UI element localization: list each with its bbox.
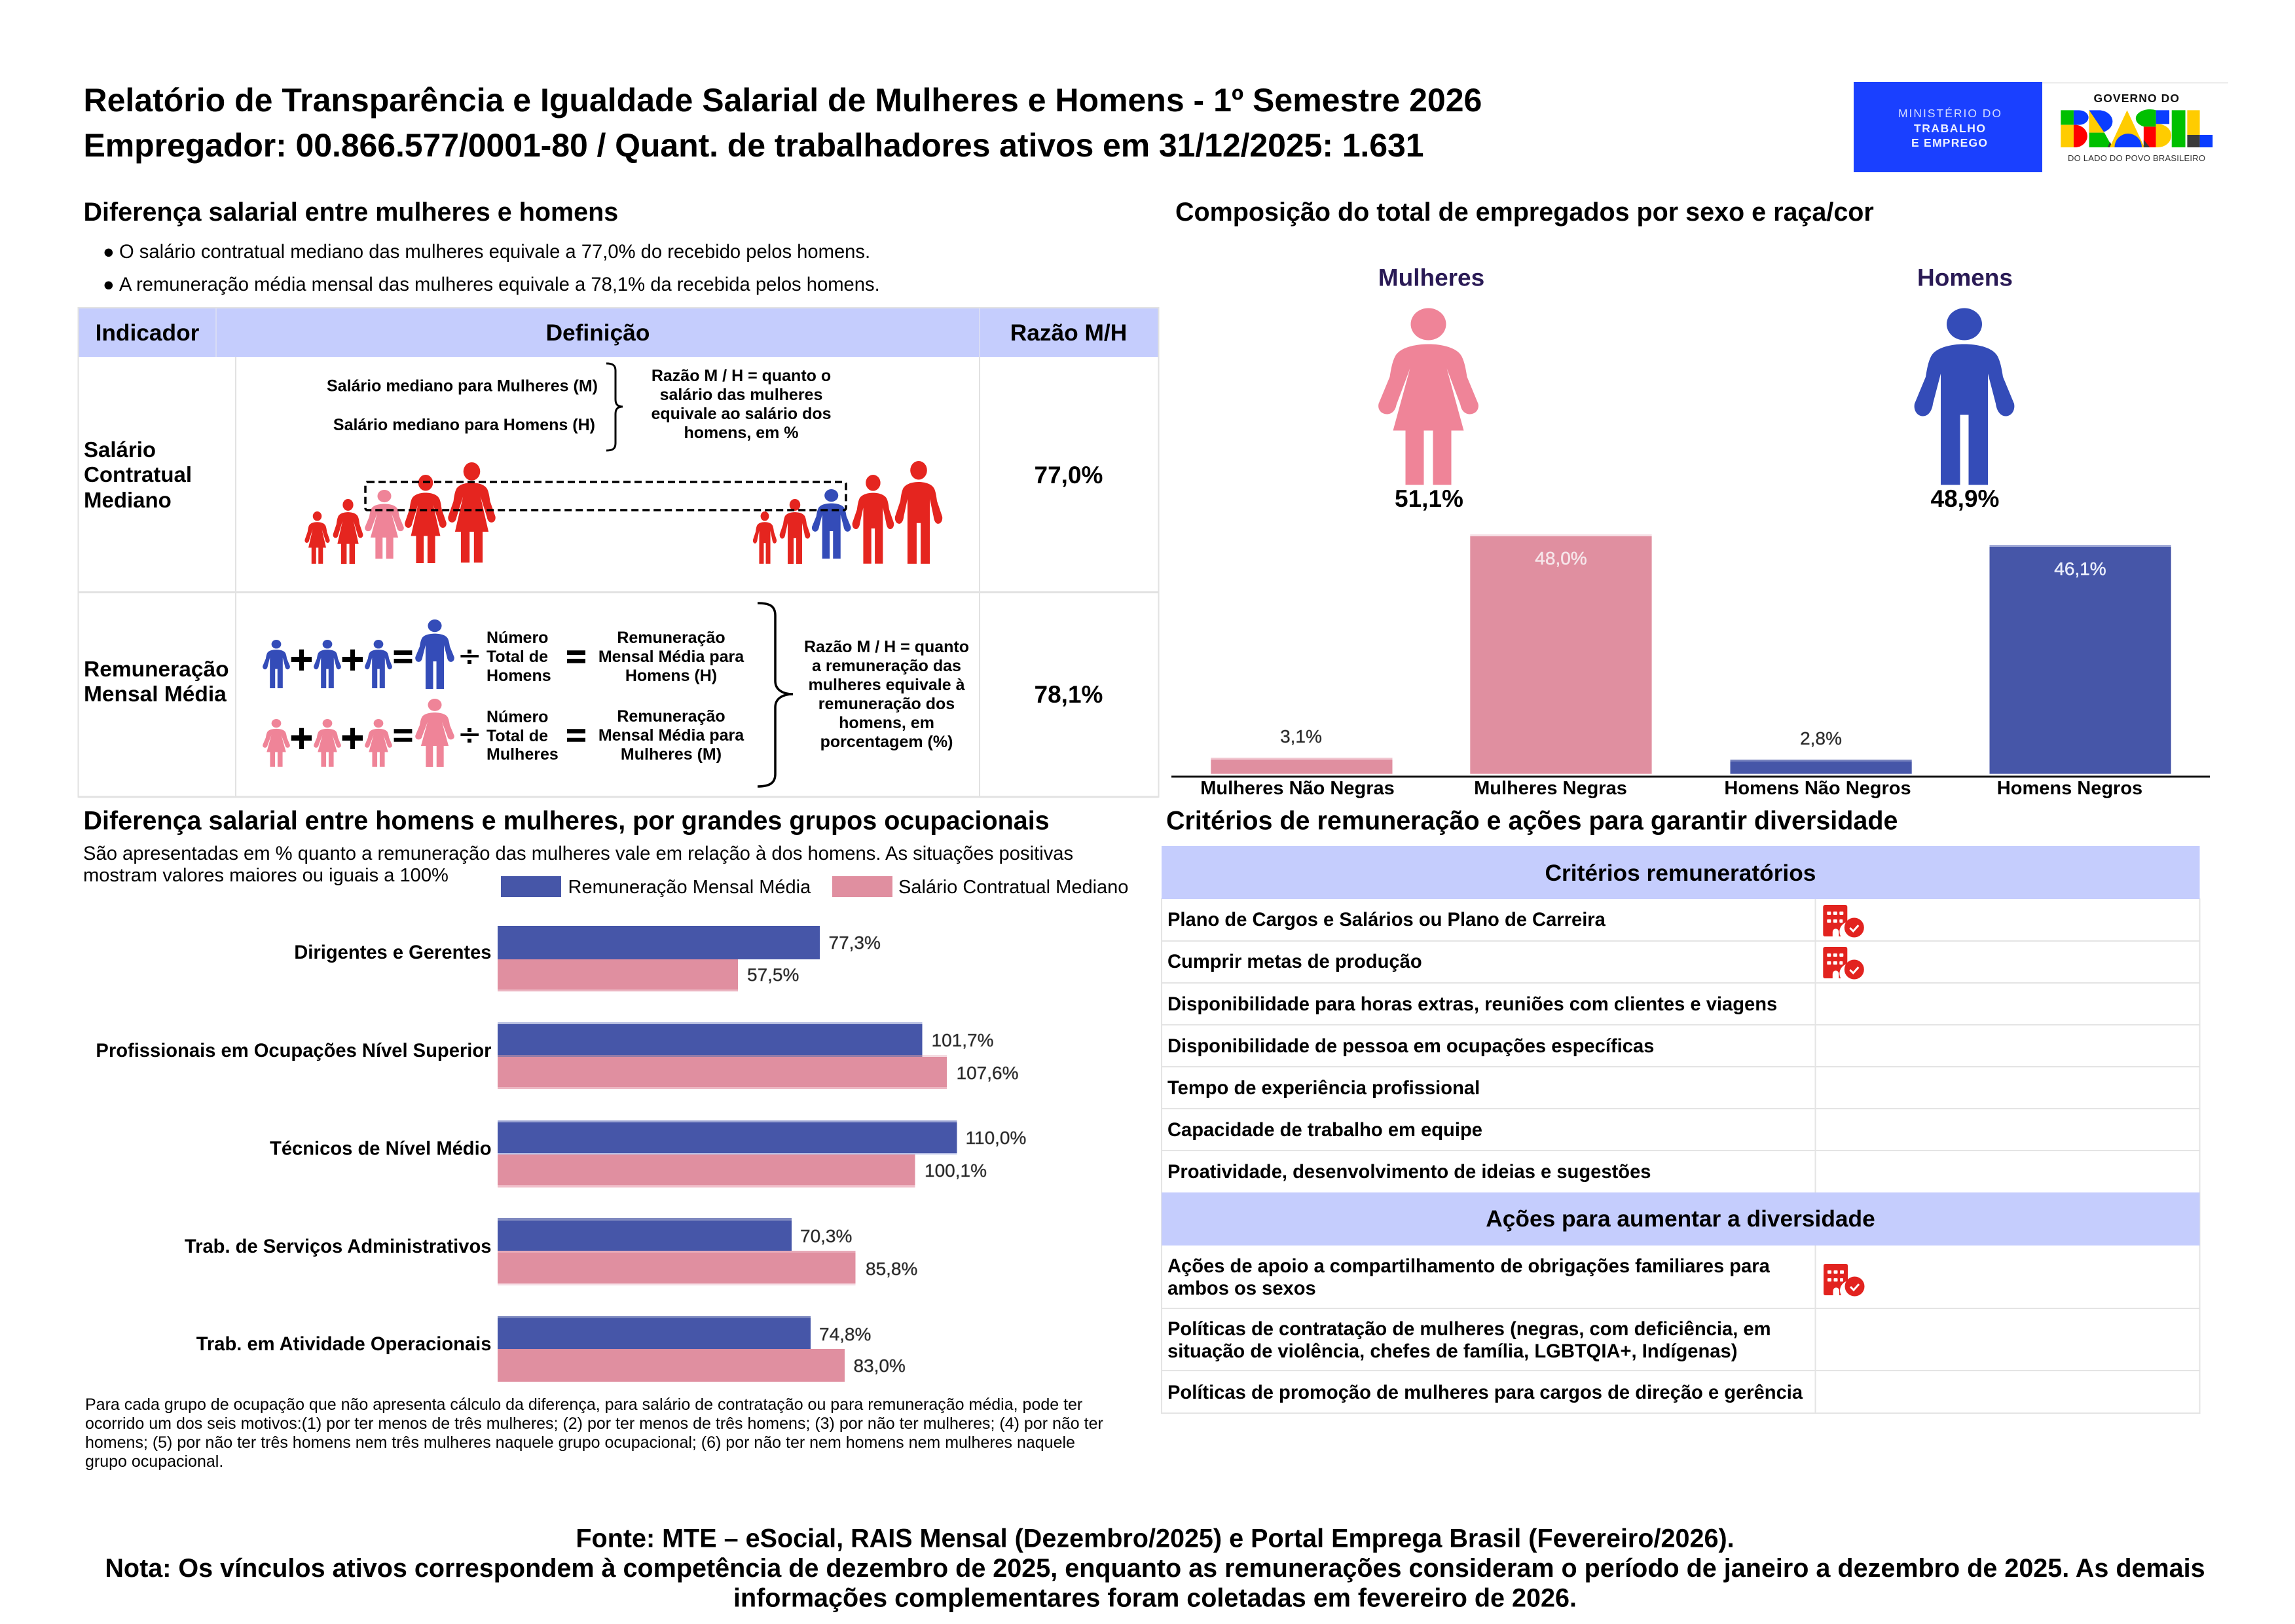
group: profissionais nível superior: Profissionais em Ocupações Nível Superior xyxy=(96,1041,491,1061)
group: atividade operacionais xyxy=(196,1316,906,1382)
bar: mulheres negras xyxy=(1470,534,1652,799)
formula: women: Total de xyxy=(487,727,548,745)
title: Empregador: 00.866.577/0001-80 / Quant. de trabalhadores ativos em 31/12/2025: 1.631 xyxy=(84,127,1423,164)
group: técnicos de nível médio: 100,1% xyxy=(925,1160,987,1181)
ratio explanation: homens, em xyxy=(839,714,934,732)
criteria rows: Cumprir metas de produção xyxy=(1167,951,1422,972)
bar: homens não negros: 2,8% xyxy=(1800,728,1842,748)
icons: men ordered by salary xyxy=(753,461,942,564)
panel: criteria table xyxy=(1162,846,2200,1413)
group: profissionais nível superior xyxy=(96,1022,1018,1089)
formula: women: Remuneração xyxy=(617,707,725,726)
row: salário contratual mediano: Contratual xyxy=(84,462,192,487)
criteria rows: Disponibilidade de pessoa em ocupações específicas xyxy=(1167,1036,1654,1057)
group: técnicos de nível médio: Técnicos de Nível Médio xyxy=(270,1138,491,1159)
action rows: situação de violência, chefes de família, LGBTQIA+, Indígenas) xyxy=(1167,1341,1737,1362)
bar: homens não negros xyxy=(1724,728,1912,799)
ratio explanation: mulheres equivale à xyxy=(808,676,965,694)
text block: key findings: O salário contratual mediano das mulheres equivale a 77,0% do recebido pelos homens. xyxy=(119,242,870,263)
icon: company check xyxy=(1823,905,1864,938)
footer: source and note: Nota: Os vínculos ativos correspondem à competência de dezembro de 2025, enquanto as remunerações consideram o período de janeiro a dezembro de 2025. As demais xyxy=(105,1554,2205,1583)
criteria rows xyxy=(1167,910,1777,1183)
bar: homens não negros: Homens Não Negros xyxy=(1724,778,1911,799)
bar: mulheres negras: 48,0% xyxy=(1535,548,1587,568)
row: remuneração mensal média: Remuneração xyxy=(84,657,229,682)
logo: Ministério do Trabalho e Emprego / Governo do Brasil xyxy=(1854,82,2228,172)
header: critérios remuneratórios: Critérios remuneratórios xyxy=(1545,860,1816,886)
bar chart: occupational groups xyxy=(96,926,1026,1382)
row: remuneração mensal média: Mensal Média xyxy=(84,682,227,707)
row: salário contratual mediano xyxy=(84,363,1103,564)
bar: mulheres não negras: Mulheres Não Negras xyxy=(1200,778,1395,799)
criteria rows: Tempo de experiência profissional xyxy=(1167,1078,1480,1099)
title: Relatório de Transparência e Igualdade Salarial de Mulheres e Homens - 1º Semestre 2026 xyxy=(84,82,1482,119)
formula: women: Mulheres (M) xyxy=(621,745,722,764)
group: profissionais nível superior: 107,6% xyxy=(956,1063,1018,1083)
text block: chart explanation: mostram valores maiores ou iguais a 100% xyxy=(83,865,449,886)
logo: Ministério do Trabalho e Emprego / Governo do Brasil: TRABALHO xyxy=(1914,122,1985,135)
formula: men: Homens xyxy=(487,667,551,685)
panel: men share: 48,9% xyxy=(1931,485,1999,512)
criteria rows: Capacidade de trabalho em equipe xyxy=(1167,1120,1482,1141)
group: atividade operacionais: Trab. em Atividade Operacionais xyxy=(196,1334,491,1355)
text block: chart explanation: São apresentadas em % quanto a remuneração das mulheres vale em relação à dos homens. As situações positivas xyxy=(83,843,1073,864)
action rows: Políticas de promoção de mulheres para cargos de direção e gerência xyxy=(1167,1382,1803,1403)
value 77,0%: 77,0% xyxy=(1035,462,1103,489)
text block: chart footnote: ocorrido um dos seis motivos:(1) por ter menos de três mulheres; (2) por ter menos de três homens; (3) por não ter mulheres; (4) por não ter xyxy=(85,1414,1103,1433)
group: atividade operacionais: 74,8% xyxy=(819,1324,871,1344)
text block: chart footnote: grupo ocupacional. xyxy=(85,1452,223,1471)
ratio explanation xyxy=(804,638,969,751)
formula: men: Homens (H) xyxy=(625,667,717,685)
text block: key findings: A remuneração média mensal das mulheres equivale a 78,1% da recebida pelos homens. xyxy=(119,274,880,295)
footer: source and note xyxy=(105,1524,2205,1612)
panel: women share: Mulheres xyxy=(1378,265,1484,291)
text block: key findings: ● xyxy=(103,274,115,295)
header: ações para aumentar a diversidade xyxy=(1162,1192,2200,1246)
formula: men: Total de xyxy=(487,648,548,666)
row: remuneração mensal média xyxy=(84,603,1103,786)
text block: chart footnote: Para cada grupo de ocupação que não apresenta cálculo da diferença, para salário de contratação ou para remuneração média, pode ter xyxy=(85,1395,1082,1414)
group: profissionais nível superior: 101,7% xyxy=(931,1030,993,1050)
ratio explanation: a remuneração das xyxy=(812,657,961,675)
ratio explanation: Razão M / H = quanto xyxy=(804,638,969,656)
group: atividade operacionais: 83,0% xyxy=(854,1356,906,1376)
header: ações para aumentar a diversidade: Ações para aumentar a diversidade xyxy=(1486,1206,1875,1232)
heading: grupos ocupacionais: Diferença salarial entre homens e mulheres, por grandes grupos ocupacionais xyxy=(84,807,1050,836)
brace xyxy=(606,363,623,451)
text block: chart footnote: homens; (5) por não ter três homens nem três mulheres naquele grupo ocupacional; (6) por não ter nem homens nem mulheres naquele xyxy=(85,1433,1075,1452)
ratio explanation: equivale ao salário dos xyxy=(651,405,832,423)
row: salário contratual mediano: Mediano xyxy=(84,488,172,512)
group: serviços administrativos xyxy=(185,1218,917,1285)
table header xyxy=(79,308,1159,357)
heading: critérios: Critérios de remuneração e ações para garantir diversidade xyxy=(1166,807,1898,836)
dashed median box xyxy=(365,482,846,510)
legend: Remuneração Mensal Média xyxy=(568,877,811,898)
table header: Razão M/H xyxy=(1010,320,1127,346)
action rows: ambos os sexos xyxy=(1167,1278,1316,1299)
formula: men: Mensal Média para xyxy=(598,648,744,666)
panel: men share: Homens xyxy=(1917,265,2013,291)
group: dirigentes e gerentes xyxy=(294,926,881,991)
formula: women: Mensal Média para xyxy=(598,726,744,745)
icon: company check xyxy=(1824,1264,1865,1297)
bar: mulheres negras: Mulheres Negras xyxy=(1474,778,1627,799)
ratio explanation: remuneração dos xyxy=(818,695,955,713)
group: serviços administrativos: Trab. de Serviços Administrativos xyxy=(185,1236,491,1257)
ratio explanation: homens, em % xyxy=(684,424,799,442)
group: dirigentes e gerentes: 77,3% xyxy=(829,932,881,953)
logo: Ministério do Trabalho e Emprego / Governo do Brasil: DO LADO DO POVO BRASILEIRO xyxy=(2068,153,2205,163)
ratio explanation: Razão M / H = quanto o xyxy=(652,367,831,385)
median definition labels: Salário mediano para Mulheres (M) xyxy=(327,377,598,396)
formula: men: Número xyxy=(487,629,548,647)
icons: women ordered by salary xyxy=(304,462,496,564)
header: critérios remuneratórios xyxy=(1162,846,2200,899)
value 78,1%: 78,1% xyxy=(1035,681,1103,708)
text block: key findings xyxy=(103,242,880,295)
text block: key findings: ● xyxy=(103,242,115,263)
panel: women share xyxy=(1378,265,1484,512)
bar: homens negros: Homens Negros xyxy=(1997,778,2142,799)
logo: Ministério do Trabalho e Emprego / Governo do Brasil: E EMPREGO xyxy=(1911,136,1987,149)
logo: Ministério do Trabalho e Emprego / Governo do Brasil: GOVERNO DO xyxy=(2094,92,2179,105)
action rows: Ações de apoio a compartilhamento de obrigações familiares para xyxy=(1167,1256,1771,1277)
logo: Ministério do Trabalho e Emprego / Governo do Brasil: MINISTÉRIO DO xyxy=(1898,107,2001,120)
group: técnicos de nível médio xyxy=(270,1120,1026,1188)
action rows xyxy=(1167,1256,1803,1403)
ratio explanation: salário das mulheres xyxy=(660,386,822,404)
icon: company check xyxy=(1823,947,1864,980)
median definition labels xyxy=(327,377,598,434)
criteria rows: Plano de Cargos e Salários ou Plano de Carreira xyxy=(1167,910,1606,931)
bar: mulheres não negras xyxy=(1200,726,1395,799)
bar: homens negros: 46,1% xyxy=(2054,559,2106,579)
heading: diferença salarial: Diferença salarial entre mulheres e homens xyxy=(84,198,618,227)
median definition labels: Salário mediano para Homens (H) xyxy=(333,416,595,434)
title xyxy=(84,82,1482,164)
formula: men xyxy=(263,619,744,689)
criteria rows: Disponibilidade para horas extras, reuniões com clientes e viagens xyxy=(1167,994,1777,1015)
formula: men: Remuneração xyxy=(617,629,725,647)
bar: homens negros xyxy=(1989,545,2171,799)
group: serviços administrativos: 70,3% xyxy=(800,1226,852,1246)
panel: indicator table xyxy=(79,308,1159,797)
table header: Definição xyxy=(546,320,650,346)
text block: chart footnote xyxy=(85,1395,1103,1471)
legend: Salário Contratual Mediano xyxy=(898,877,1128,898)
group: serviços administrativos: 85,8% xyxy=(866,1259,917,1279)
criteria rows: Proatividade, desenvolvimento de ideias e sugestões xyxy=(1167,1162,1651,1183)
heading: composição: Composição do total de empregados por sexo e raça/cor xyxy=(1175,198,1874,227)
panel: men share xyxy=(1915,265,2014,512)
group: técnicos de nível médio: 110,0% xyxy=(965,1128,1026,1148)
group: dirigentes e gerentes: 57,5% xyxy=(747,965,799,985)
legend xyxy=(501,876,1128,898)
ratio explanation: porcentagem (%) xyxy=(820,733,953,751)
group: dirigentes e gerentes: Dirigentes e Gerentes xyxy=(294,942,491,963)
footer: source and note: informações complementares foram coletadas em fevereiro de 2026. xyxy=(733,1583,1577,1612)
action rows: Políticas de contratação de mulheres (negras, com deficiência, em xyxy=(1167,1319,1771,1340)
bar: mulheres não negras: 3,1% xyxy=(1280,726,1322,747)
ratio explanation xyxy=(651,367,832,442)
row: salário contratual mediano: Salário xyxy=(84,437,156,462)
formula: women: Mulheres xyxy=(487,745,559,764)
bar chart: composition by sex and race xyxy=(1171,534,2210,799)
formula: women: Número xyxy=(487,708,548,726)
table header: Indicador xyxy=(96,320,200,346)
panel: women share: 51,1% xyxy=(1395,485,1463,512)
text block: chart explanation xyxy=(83,843,1073,886)
formula: women xyxy=(263,699,744,767)
big brace xyxy=(758,603,793,786)
footer: source and note: Fonte: MTE – eSocial, RAIS Mensal (Dezembro/2025) e Portal Emprega Brasil (Fevereiro/2026). xyxy=(576,1524,1735,1553)
